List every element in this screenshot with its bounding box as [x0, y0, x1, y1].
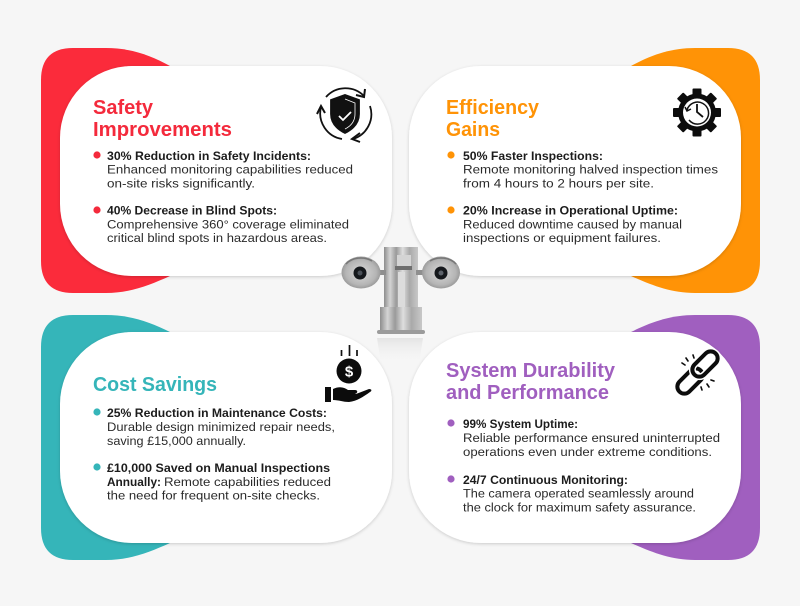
bullet list: durability: The camera operated seamlessly around [463, 486, 694, 500]
bullet list: durability: operations even under extreme conditions. [463, 445, 712, 459]
icon: shield with rotating arrows [317, 88, 371, 142]
white card [60, 332, 392, 543]
bullet list: cost: Remote capabilities reduced [164, 475, 331, 489]
bullet list: durability: the clock for maximum safety assurance. [463, 500, 696, 514]
heading: safety improvements: Improvements [93, 119, 232, 141]
heading: system durability and performance [446, 360, 616, 404]
bullet list: safety: critical blind spots in hazardous areas. [107, 231, 327, 245]
heading: safety improvements [93, 97, 232, 141]
panel: cost savings [41, 315, 392, 560]
icon: hand holding dollar coin: $ [345, 364, 354, 380]
bullet list: durability: Reliable performance ensured uninterrupted [463, 431, 720, 445]
camera arms [378, 270, 386, 275]
bullet list: efficiency: from 4 hours to 2 hours per site. [463, 176, 654, 190]
bullet list: efficiency: Remote monitoring halved inspection times [463, 162, 718, 176]
heading: system durability and performance: System Durability [446, 360, 616, 382]
bullet list: safety: 40% Decrease in Blind Spots: [107, 204, 277, 218]
bullet list: efficiency: inspections or equipment failures. [463, 231, 661, 245]
camera column [384, 247, 418, 307]
bullet list: durability: 99% System Uptime: [463, 417, 578, 431]
panel: system durability and performance [409, 315, 760, 560]
bullet list: cost: Annually: [107, 475, 161, 489]
heading: efficiency gains: Gains [446, 119, 500, 141]
bullet list: safety: Enhanced monitoring capabilities reduced [107, 162, 353, 176]
teal backing shape [41, 315, 170, 560]
heading: cost savings: Cost Savings [93, 374, 217, 396]
bullet list: cost: the need for frequent on-site checks. [107, 488, 320, 502]
bullet list: durability [447, 417, 720, 514]
bullet list: efficiency [447, 149, 718, 245]
red backing shape [41, 48, 170, 293]
left lens housing [342, 256, 380, 288]
bullet list: cost: 25% Reduction in Maintenance Costs: [107, 406, 327, 420]
heading: safety improvements: Safety [93, 97, 154, 119]
bullet list: safety: Comprehensive 360° coverage eliminated [107, 218, 349, 232]
icon: hand holding dollar coin [325, 345, 371, 402]
heading: system durability and performance: and Performance [446, 382, 609, 404]
camera reflection [377, 338, 423, 364]
heading: efficiency gains [446, 97, 540, 141]
right lens housing [422, 256, 460, 288]
bullet list: safety: on-site risks significantly. [107, 176, 255, 190]
bullet list: efficiency: Reduced downtime caused by manual [463, 218, 682, 232]
bullet list: durability: 24/7 Continuous Monitoring: [463, 473, 628, 487]
bullet list: cost: Durable design minimized repair needs, [107, 420, 335, 434]
heading: efficiency gains: Efficiency [446, 97, 540, 119]
bullet list: efficiency: 50% Faster Inspections: [463, 149, 603, 163]
bullet list: cost [93, 406, 335, 502]
white card [409, 66, 741, 276]
bullet list: cost: £10,000 Saved on Manual Inspections [107, 461, 330, 475]
icon: gear with clock [673, 88, 721, 136]
white card [409, 332, 741, 543]
bullet list: efficiency: 20% Increase in Operational Uptime: [463, 204, 678, 218]
bullet list: cost: saving £15,000 annually. [107, 434, 246, 448]
panel: efficiency gains [409, 48, 760, 293]
purple backing shape [631, 315, 760, 560]
panel: safety improvements [41, 48, 392, 293]
camera: stainless dual-lens unit [342, 247, 460, 364]
bullet list: safety [93, 149, 353, 245]
white card [60, 66, 392, 276]
bullet list: safety: 30% Reduction in Safety Incidents: [107, 149, 311, 163]
icon: broken chain link [674, 348, 721, 397]
orange backing shape [631, 48, 760, 293]
